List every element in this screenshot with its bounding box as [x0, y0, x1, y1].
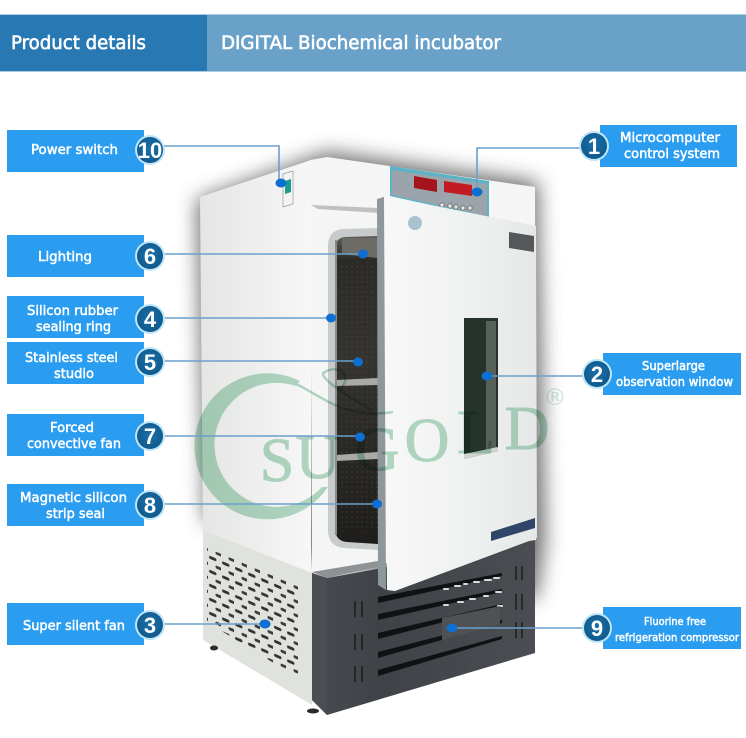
label: superlarge observation window: 2 — [591, 362, 603, 387]
cabinet feet — [210, 646, 319, 714]
dark base — [312, 540, 535, 715]
watermark logo: L — [457, 399, 495, 467]
label: superlarge observation window — [582, 353, 741, 395]
label: power switch — [7, 130, 165, 172]
heading: digital biochemical incubator: DIGITAL Biochemical incubator — [221, 32, 501, 54]
label: super silent fan: 3 — [144, 613, 156, 638]
label: power switch: Power switch — [31, 143, 118, 158]
incubator illustration — [197, 152, 545, 715]
label: fluorine free refrigeration compressor — [582, 607, 741, 649]
watermark logo: D — [505, 395, 549, 463]
door edge strip — [377, 197, 386, 590]
base top edge — [312, 561, 382, 578]
label: stainless steel studio — [7, 342, 165, 384]
door seal — [335, 240, 337, 535]
label: silicon rubber sealing ring: sealing ring — [36, 320, 111, 335]
label: power switch: 10 — [138, 138, 162, 163]
watermark logo: U — [296, 424, 340, 492]
door badge — [408, 216, 422, 230]
door nameplate — [509, 232, 534, 252]
label: superlarge observation window: Superlarge — [642, 359, 705, 373]
label: forced convective fan: 7 — [144, 424, 156, 449]
label: forced convective fan — [7, 414, 165, 456]
header right band — [207, 15, 746, 71]
white slot highlights — [444, 578, 502, 613]
label: fluorine free refrigeration compressor: Fluorine free — [644, 615, 706, 628]
label: magnetic silicon strip seal: strip seal — [46, 507, 105, 522]
label: forced convective fan: Forced — [50, 421, 94, 436]
stainless shelf 2 — [336, 452, 378, 461]
door spec plate — [491, 518, 535, 541]
label: lighting: Lighting — [38, 250, 92, 265]
lower side vent panel — [203, 530, 312, 705]
label: microcomputer control system — [579, 125, 737, 167]
observation window — [464, 318, 498, 459]
header left tab — [0, 15, 207, 71]
label: fluorine free refrigeration compressor: 9 — [591, 616, 603, 641]
label: magnetic silicon strip seal: Magnetic silicon — [20, 491, 127, 506]
label: magnetic silicon strip seal: 8 — [144, 493, 156, 518]
label: silicon rubber sealing ring: 4 — [144, 307, 157, 332]
registered mark: ® — [544, 385, 566, 411]
label: stainless steel studio: studio — [54, 367, 94, 382]
label: silicon rubber sealing ring — [7, 296, 165, 338]
cabinet side panel — [200, 160, 311, 573]
label: silicon rubber sealing ring: Silicon rubber — [27, 304, 119, 319]
chamber opening — [328, 228, 378, 550]
interior mesh — [338, 262, 378, 532]
label: microcomputer control system: Microcomputer — [620, 131, 721, 146]
control panel — [390, 166, 489, 218]
ventilation slots — [378, 573, 502, 676]
label: microcomputer control system: 1 — [588, 134, 600, 159]
label: stainless steel studio: 5 — [144, 350, 156, 375]
label: lighting — [7, 235, 165, 277]
display right — [444, 181, 472, 196]
label: magnetic silicon strip seal — [7, 484, 165, 526]
compressor glimpse — [442, 606, 500, 640]
stainless shelf 1 — [336, 378, 378, 386]
label: super silent fan: Super silent fan — [23, 619, 125, 634]
label: super silent fan — [7, 603, 165, 645]
watermark logo: G — [355, 416, 399, 484]
ledge above opening — [311, 205, 378, 213]
header banner — [0, 14, 746, 72]
open door — [377, 197, 537, 591]
label: superlarge observation window: observation window — [616, 375, 733, 389]
cabinet front face — [310, 157, 536, 575]
watermark letters: S — [260, 427, 294, 495]
label: forced convective fan: convective fan — [27, 437, 121, 452]
vertical slits — [355, 566, 522, 682]
power switch sticker — [283, 171, 293, 207]
callout lines — [150, 146, 597, 628]
watermark logo: O — [405, 407, 449, 475]
label: microcomputer control system: control system — [624, 147, 720, 162]
watermark logo — [194, 369, 566, 519]
label: stainless steel studio: Stainless steel — [25, 351, 118, 366]
label: lighting: 6 — [144, 244, 156, 269]
upper chamber lamp — [342, 238, 378, 258]
side vent holes — [207, 548, 298, 678]
cabinet shadow — [197, 152, 545, 600]
callout target dots — [260, 178, 492, 632]
heading: product details: Product details — [11, 32, 146, 54]
panel buttons — [440, 203, 472, 210]
display left — [414, 176, 437, 192]
